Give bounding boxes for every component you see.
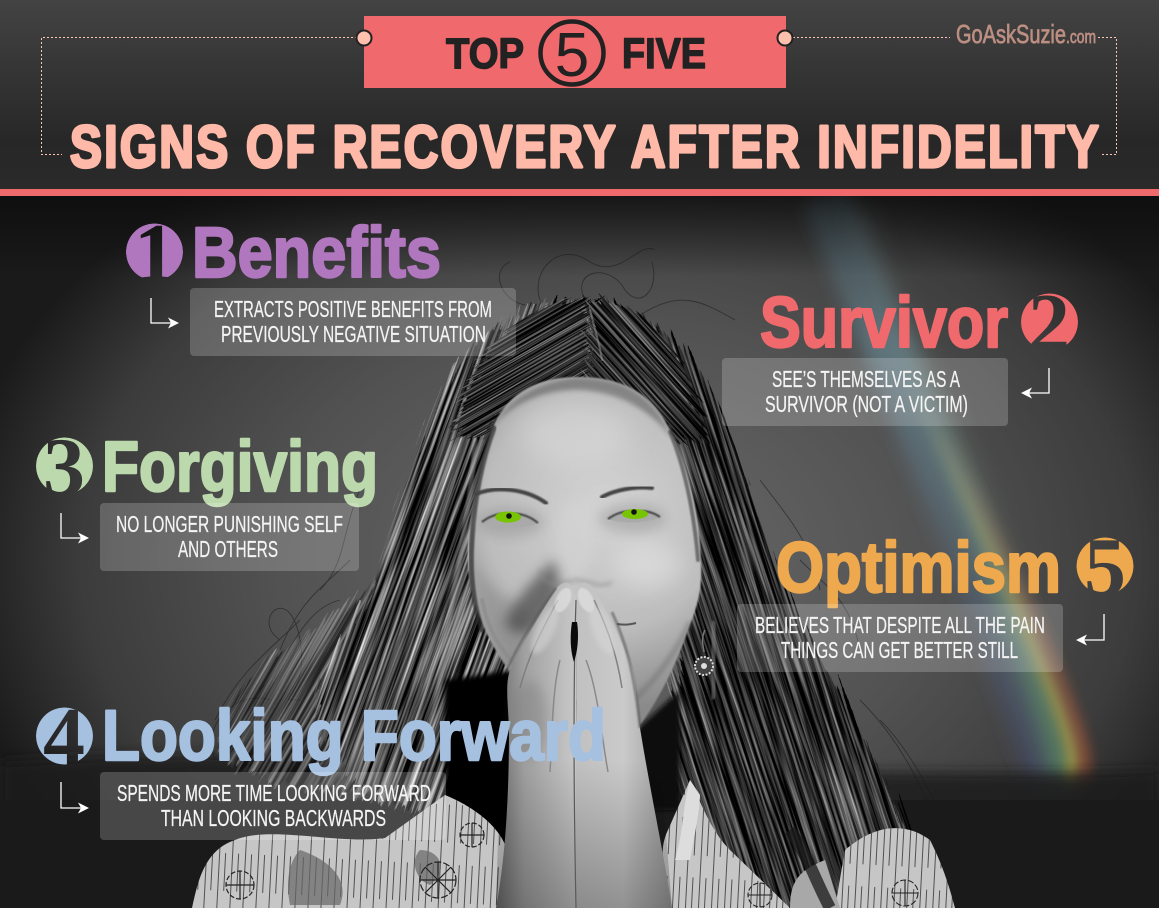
item 4: looking forward [36, 697, 606, 840]
hair: crown [209, 298, 836, 440]
dotted title frame [42, 38, 1116, 154]
site name: GoAskSuzie.com [956, 19, 1096, 49]
item 4: looking forward: Looking Forward [102, 697, 606, 776]
jaw shadow [634, 622, 690, 700]
item 2: survivor [722, 284, 1078, 426]
top five badge: TOP [446, 30, 524, 78]
ground [0, 754, 1159, 908]
header band [0, 0, 1159, 196]
item 1: benefits [126, 214, 516, 356]
item 5: optimism [737, 529, 1134, 672]
eye: right [608, 509, 660, 523]
item 1: benefits: EXTRACTS POSITIVE BENEFITS FROM [214, 296, 492, 322]
shadow behind hands [445, 670, 515, 880]
item 1: benefits: PREVIOUSLY NEGATIVE SITUATION [221, 321, 486, 347]
nose base [540, 570, 612, 585]
item 3: forgiving: AND OTHERS [178, 536, 278, 562]
item 1: benefits: Benefits [192, 214, 441, 293]
hair: right side [377, 300, 1138, 908]
top five badge [356, 16, 792, 90]
blouse left [192, 795, 507, 908]
item 4: looking forward: SPENDS MORE TIME LOOKING FORWARD [117, 780, 431, 806]
strands over face edge [471, 428, 698, 670]
rainbow [825, 196, 1085, 785]
cheek highlight [614, 541, 682, 589]
mouth [617, 623, 636, 625]
eye sockets [476, 507, 544, 537]
blouse right [662, 780, 955, 908]
item 2: survivor: Survivor [760, 284, 1008, 363]
hands and arms [496, 583, 672, 908]
hairline shadow [490, 378, 672, 438]
nose shadow [505, 560, 559, 634]
hair highlights [340, 310, 715, 800]
flyaway hair [212, 248, 965, 880]
item 3: forgiving [36, 428, 378, 571]
item 5: optimism: THINGS CAN GET BETTER STILL [781, 637, 1018, 663]
main title: SIGNS OF RECOVERY AFTER INFIDELITY [70, 114, 1099, 180]
item 4: looking forward: THAN LOOKING BACKWARDS [161, 805, 386, 831]
brows [476, 489, 546, 503]
photo: woman and rainbow background [0, 196, 1159, 908]
top five badge: 5 [555, 21, 589, 90]
item 2: survivor: SEE’S THEMSELVES AS A [772, 366, 960, 392]
earring [695, 630, 713, 675]
item 3: forgiving: NO LONGER PUNISHING SELF [116, 511, 343, 537]
item 5: optimism: Optimism [776, 529, 1061, 608]
top five badge: FIVE [622, 30, 706, 78]
item 3: forgiving: Forgiving [102, 428, 378, 507]
hair: left side [115, 300, 785, 850]
hand shading [506, 588, 640, 908]
item 2: survivor: SURVIVOR (NOT A VICTIM) [765, 391, 968, 417]
eye: left [482, 512, 538, 528]
face [468, 377, 701, 725]
hair: left wisps [72, 540, 590, 800]
